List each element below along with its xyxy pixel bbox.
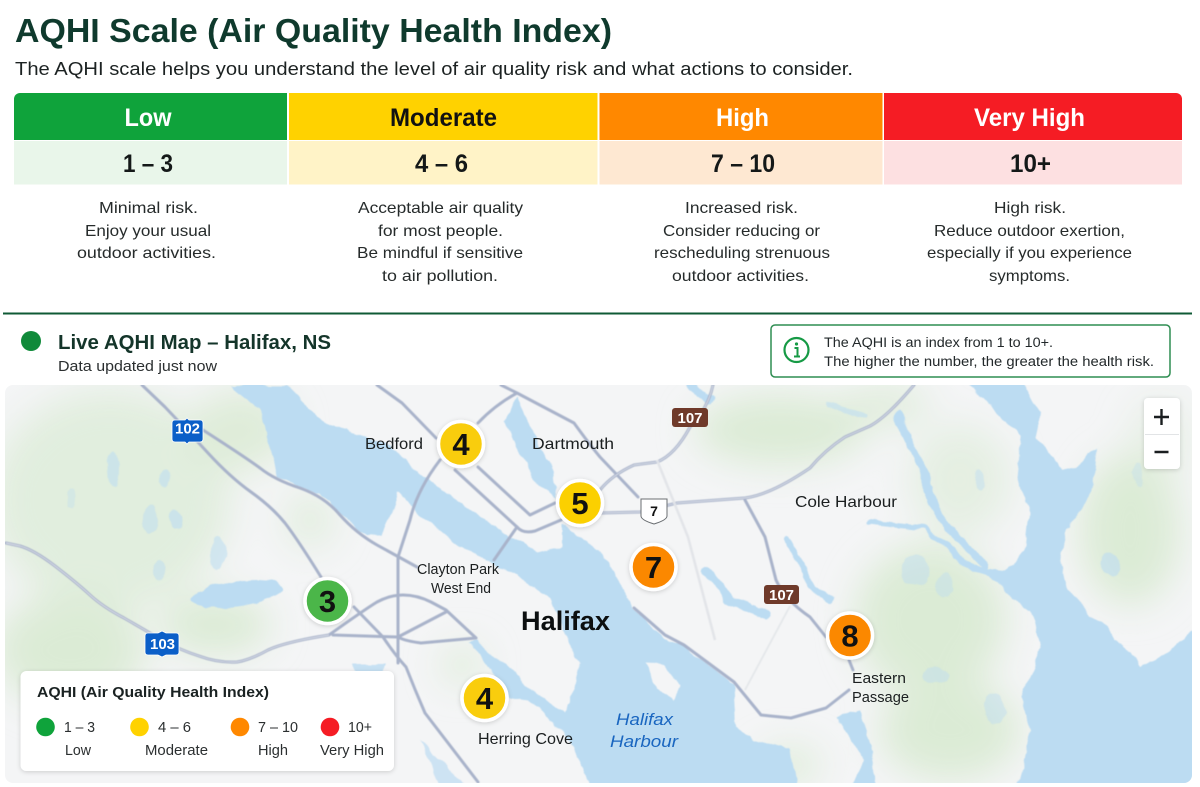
column: low: Enjoy your usual [85,223,211,240]
shield: 103: 103 [150,636,175,653]
marker: 7 [631,544,676,590]
shield: 7: 7 [650,503,658,519]
column: high: 7 – 10 [711,150,775,178]
legend item: very high [320,718,384,759]
lakes [66,452,1143,725]
place labels: Cole Harbour [795,494,898,511]
legend item: high: 7 – 10 [258,720,298,736]
zoom control [1144,398,1180,469]
column: very high: especially if you experience [927,245,1132,262]
marker: south 4: 4 [476,681,494,716]
icon: info [784,338,808,362]
update note: Data updated just now [58,359,218,375]
place labels: Eastern [852,670,906,687]
column: moderate: 4 – 6 [415,150,468,178]
legend item: moderate [130,718,208,759]
legend item: low: 1 – 3 [64,720,95,736]
shield: 107 south [764,585,799,604]
marker: 3: 3 [319,584,336,619]
column: very high [884,93,1182,285]
column: very high: Very High [974,104,1085,132]
place labels: Halifax [616,710,674,729]
column: low: Low [124,104,172,132]
marker: south 4 [462,676,507,720]
shield: 102: 102 [175,420,200,438]
place labels: West End [431,581,491,597]
shield: 103 [145,631,179,657]
column: low: outdoor activities. [77,245,216,262]
callout: info box: The AQHI is an index from 1 to 10+. [824,335,1053,350]
title: AQHI Scale (Air Quality Health Index) [15,12,612,49]
shield: 107 north [672,408,708,427]
column: moderate: Be mindful if sensitive [357,245,523,262]
column: low: 1 – 3 [123,150,173,178]
column: very high: Reduce outdoor exertion, [934,223,1125,240]
marker: 8 [828,613,872,658]
legend item: high [231,718,298,759]
place labels: Bedford [365,436,423,453]
legend: AQHI (Air Quality Health Index) [37,685,269,701]
shield: 102 [172,418,203,444]
column: very high: High risk. [994,200,1066,217]
column: moderate: for most people. [378,223,503,240]
green land cover [0,385,1190,781]
column: very high: 10+ [1010,150,1051,178]
legend item: very high: 10+ [348,720,372,736]
marker: Bedford 4: 4 [452,427,470,462]
column: moderate: Moderate [390,104,497,132]
live status dot [21,331,41,351]
column: low: Minimal risk. [99,200,198,217]
place labels [365,436,909,751]
shield: 107 south: 107 [769,587,794,604]
column: high: Increased risk. [685,200,798,217]
legend item: very high: Very High [320,743,384,759]
column: low [14,93,287,262]
column: very high: symptoms. [989,268,1070,285]
column: high: High [716,104,769,132]
marker: Bedford 4 [438,422,484,466]
panel: scale table [14,93,1182,285]
subtitle: The AQHI scale helps you understand the level of air quality risk and what actions to consider. [15,58,853,79]
place labels: Clayton Park [417,562,500,578]
shield: 7 [641,499,667,524]
column: moderate: to air pollution. [382,268,498,285]
column: high: rescheduling strenuous [654,245,830,262]
column: high [600,93,882,285]
map heading: Live AQHI Map – Halifax, NS [58,332,331,354]
legend item: moderate: 4 – 6 [158,720,191,736]
marker: 3 [305,578,350,624]
marker: Dartmouth 5 [558,480,602,526]
legend item: low [36,718,95,759]
legend item: high: High [258,743,288,759]
panel: live map [0,380,1195,787]
water [66,380,1195,787]
place labels: Harbour [610,732,679,751]
place labels: Passage [852,689,909,706]
column: high: outdoor activities. [672,268,809,285]
marker: 7: 7 [645,550,662,585]
land over water [647,663,680,700]
place labels: Halifax [521,606,610,636]
roads [6,385,914,782]
callout: info box [771,325,1170,377]
legend [20,671,394,771]
marker: Dartmouth 5: 5 [571,486,589,521]
column: moderate: Acceptable air quality [358,200,523,217]
legend item: low: Low [65,743,92,759]
column: high: Consider reducing or [663,223,821,240]
shield: 107 north: 107 [677,410,703,427]
callout: info box: The higher the number, the greater the health risk. [824,354,1154,369]
marker: 8: 8 [841,618,859,654]
place labels: Herring Cove [478,731,573,748]
place labels: Dartmouth [532,436,614,453]
legend item: moderate: Moderate [145,743,208,759]
column: moderate [289,93,598,285]
